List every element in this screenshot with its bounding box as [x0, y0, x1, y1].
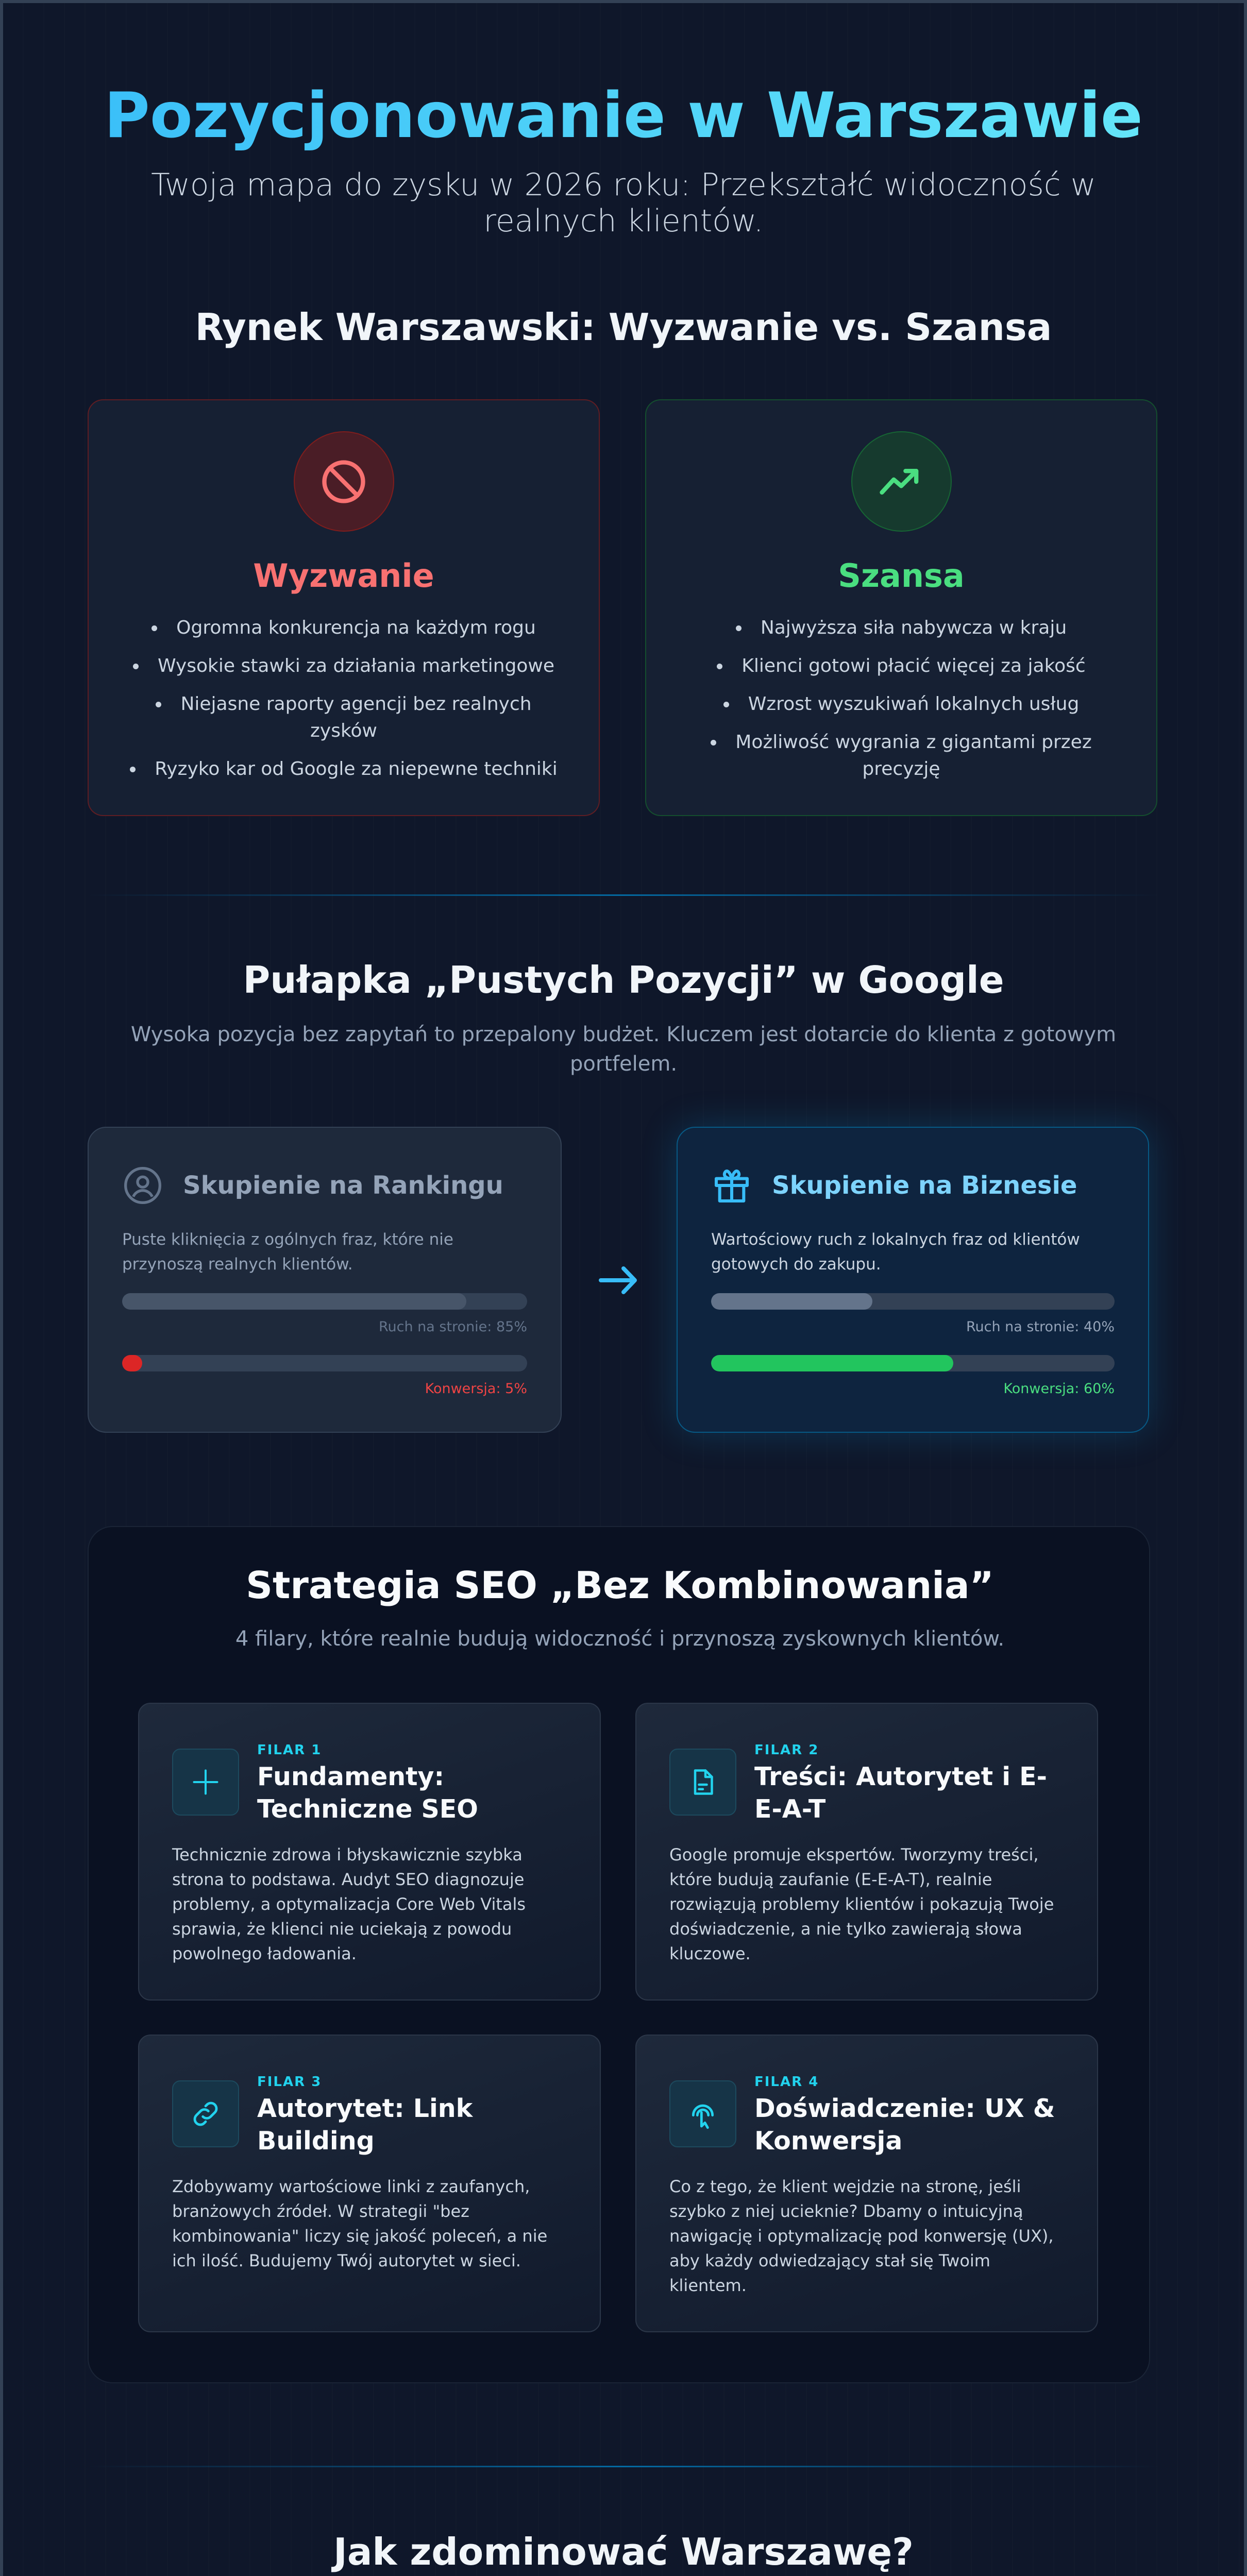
list: challenges: Ryzyko kar od Google za niepewne techniki — [155, 758, 558, 779]
subtitle: trap: Wysoka pozycja bez zapytań to przepalony budżet. Kluczem jest dotarcie do klienta z gotowym portfelem. — [131, 1023, 1116, 1076]
bar: traffic 40 — [711, 1293, 1115, 1310]
heading: trap: Pułapka „Pustych Pozycji” w Google — [243, 958, 1004, 1002]
pillar 2 — [635, 1703, 1098, 2001]
icon: trending up — [851, 431, 951, 532]
pillar 4 — [635, 2035, 1098, 2332]
text: Google promuje ekspertów. Tworzymy treści, które budują zaufanie (E-E-A-T), realnie rozwiązują problemy klientów i pokazują Twoje doświadczenie, a nie tylko zawierają słowa kluczowe. — [669, 1845, 1054, 1963]
pillar 4: Doświadczenie: UX & Konwersja — [754, 2094, 1055, 2156]
text: Co z tego, że klient wejdzie na stronę, jeśli szybko z niej ucieknie? Dbamy o intuicyjną nawigację i optymalizację pod konwersję (UX), aby każdy odwiedzający stał się Twoim klientem. — [669, 2177, 1054, 2295]
panel: strategy — [88, 1526, 1150, 2383]
list: challenges: Niejasne raporty agencji bez realnych zysków — [180, 693, 532, 741]
text: Zdobywamy wartościowe linki z zaufanych, branżowych źródeł. W strategii "bez kombinowania" liczy się jakość poleceń, a nie ich ilość. Budujemy Twój autorytet w sieci. — [172, 2177, 547, 2270]
icon: ban — [294, 431, 394, 532]
bar: conversion 60 — [711, 1355, 1115, 1371]
icon: document — [669, 1749, 736, 1816]
panel: ranking focus — [88, 1127, 562, 1433]
text: business: Wartościowy ruch z lokalnych fraz od klientów gotowych do zakupu. — [711, 1230, 1080, 1274]
header: business: Skupienie na Biznesie — [772, 1171, 1077, 1200]
heading: dominate: Jak zdominować Warszawę? — [333, 2530, 914, 2573]
title: Pozycjonowanie w Warszawie — [104, 79, 1143, 152]
pillar 4: FILAR 4 — [754, 2074, 819, 2090]
list: opportunities: Możliwość wygrania z gigantami przez precyzję — [735, 732, 1092, 779]
icon: link — [172, 2080, 239, 2147]
heading: Wyzwanie: Wyzwanie — [253, 557, 434, 595]
label: Ruch na stronie: 85% — [379, 1319, 527, 1335]
icon: plus — [172, 1749, 239, 1816]
pillar 1: Fundamenty: Techniczne SEO — [257, 1762, 478, 1824]
list: challenges — [130, 617, 558, 779]
label: Konwersja: 5% — [425, 1381, 527, 1397]
text: ranking: Puste kliknięcia z ogólnych fraz, które nie przynoszą realnych klientów. — [122, 1230, 453, 1274]
text: Technicznie zdrowa i błyskawicznie szybka strona to podstawa. Audyt SEO diagnozuje problemy, a optymalizacja Core Web Vitals sprawia, że klienci nie uciekają z powodu powolnego ładowania. — [172, 1845, 526, 1963]
panel: business focus — [677, 1127, 1149, 1433]
subtitle: strategy: 4 filary, które realnie budują widoczność i przynoszą zyskownych klientów. — [235, 1627, 1004, 1651]
header: ranking — [124, 1167, 503, 1204]
list: opportunities: Klienci gotowi płacić więcej za jakość — [742, 655, 1086, 676]
list: opportunities: Wzrost wyszukiwań lokalnych usług — [748, 693, 1079, 715]
bar: conversion 5 — [122, 1355, 527, 1371]
heading: strategy: Strategia SEO „Bez Kombinowania” — [246, 1564, 994, 1607]
bar: traffic 85 — [122, 1293, 527, 1310]
icon: pointer — [669, 2080, 736, 2147]
pillar 2: Treści: Autorytet i E-E-A-T — [754, 1762, 1047, 1824]
pillar 2: FILAR 2 — [754, 1742, 819, 1758]
pillar 3: FILAR 3 — [257, 2074, 322, 2090]
arrow — [599, 1266, 637, 1294]
label: Konwersja: 60% — [1003, 1381, 1115, 1397]
header: ranking: Skupienie na Rankingu — [183, 1171, 503, 1200]
heading: market: Rynek Warszawski: Wyzwanie vs. Szansa — [195, 306, 1052, 349]
heading: Szansa: Szansa — [838, 557, 965, 595]
pillar 3 — [138, 2035, 601, 2332]
list: challenges: Wysokie stawki za działania marketingowe — [158, 655, 554, 676]
panel: opportunity — [645, 399, 1157, 816]
list: opportunities: Najwyższa siła nabywcza w kraju — [761, 617, 1067, 638]
subtitle: Twoja mapa do zysku w 2026 roku: Przekształć widoczność w realnych klientów. — [151, 167, 1096, 239]
pillar 1 — [138, 1703, 601, 2001]
list: challenges: Ogromna konkurencja na każdym rogu — [176, 617, 536, 638]
panel: challenge — [88, 399, 600, 816]
label: Ruch na stronie: 40% — [966, 1319, 1115, 1335]
pillar 3: Autorytet: Link Building — [257, 2094, 473, 2156]
pillar 1: FILAR 1 — [257, 1742, 322, 1758]
list: opportunities — [711, 617, 1092, 779]
